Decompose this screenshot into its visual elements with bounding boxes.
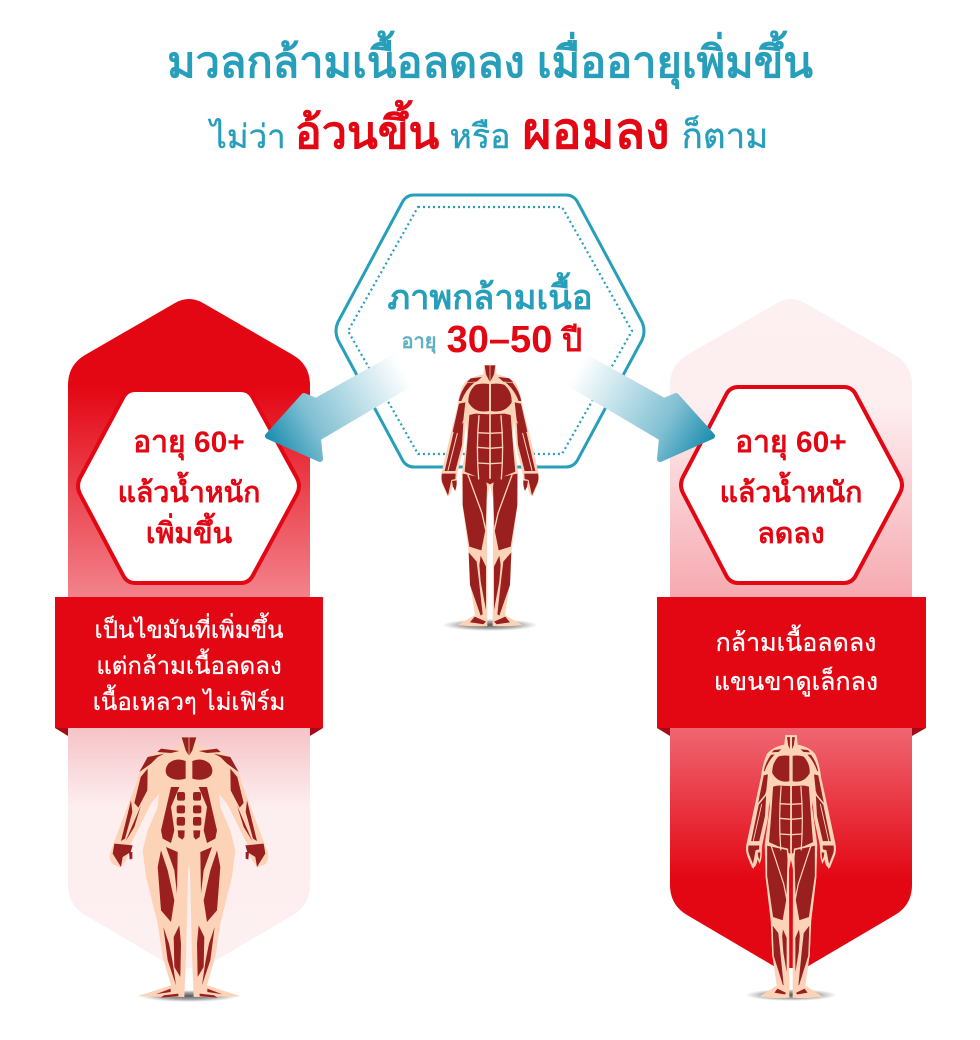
left hexagon text: แล้วน้ำหนัก (118, 471, 260, 509)
title (167, 30, 813, 159)
left ribbon text: แต่กล้ามเนื้อลดลง (96, 648, 282, 680)
left hexagon text: อายุ 60+ (133, 426, 245, 461)
panel: right weight loss (657, 299, 926, 968)
title line 2: หรือ (449, 118, 511, 156)
left banner (68, 299, 310, 968)
left hexagon (78, 390, 299, 583)
left ribbon (55, 597, 323, 728)
right hexagon text: อายุ 60+ (735, 426, 847, 461)
age label: อายุ (402, 331, 436, 354)
left ribbon text: เนื้อเหลวๆ ไม่เฟิร์ม (93, 684, 285, 716)
title line 1: มวลกล้ามเนื้อลดลง เมื่ออายุเพิ่มขึ้น (167, 30, 813, 90)
right hexagon text: ลดลง (757, 518, 825, 550)
right hexagon (681, 387, 902, 583)
arrow: right (572, 358, 712, 459)
right ribbon (657, 597, 926, 728)
figure shadow right (745, 989, 837, 1001)
center heading: ภาพกล้ามเนื้อ (387, 272, 593, 317)
outer teal hexagon (336, 195, 644, 467)
right hexagon text: แล้วน้ำหนัก (720, 471, 862, 509)
right ribbon text: แขนขาดูเล็กลง (714, 666, 878, 697)
title line 2: ไม่ว่า (207, 118, 286, 155)
right banner (670, 299, 912, 968)
title line 2 (207, 99, 768, 159)
age range: 30–50 (447, 319, 552, 361)
figure: right body (747, 736, 835, 997)
panel: center hexagon (336, 195, 644, 467)
ribbon fold right (657, 728, 926, 736)
title line 2: ก็ตาม (682, 115, 768, 156)
arrow: left (268, 358, 408, 459)
figure shadow left (139, 990, 239, 1002)
panel: left weight gain (55, 299, 323, 968)
figure: left body (110, 737, 268, 998)
dotted inner hexagon (348, 207, 632, 454)
title line 2: อ้วนขึ้น (295, 99, 440, 158)
left ribbon text: เป็นไขมันที่เพิ่มขึ้น (94, 612, 284, 644)
ribbon fold left (55, 728, 323, 736)
figure shadow center (442, 619, 538, 631)
title line 2: ผอมลง (522, 103, 670, 159)
left hexagon text: เพิ่มขึ้น (146, 512, 233, 550)
right ribbon text: กล้ามเนื้อลดลง (716, 624, 876, 657)
figure: center body (441, 365, 539, 626)
age unit: ปี (560, 322, 582, 358)
